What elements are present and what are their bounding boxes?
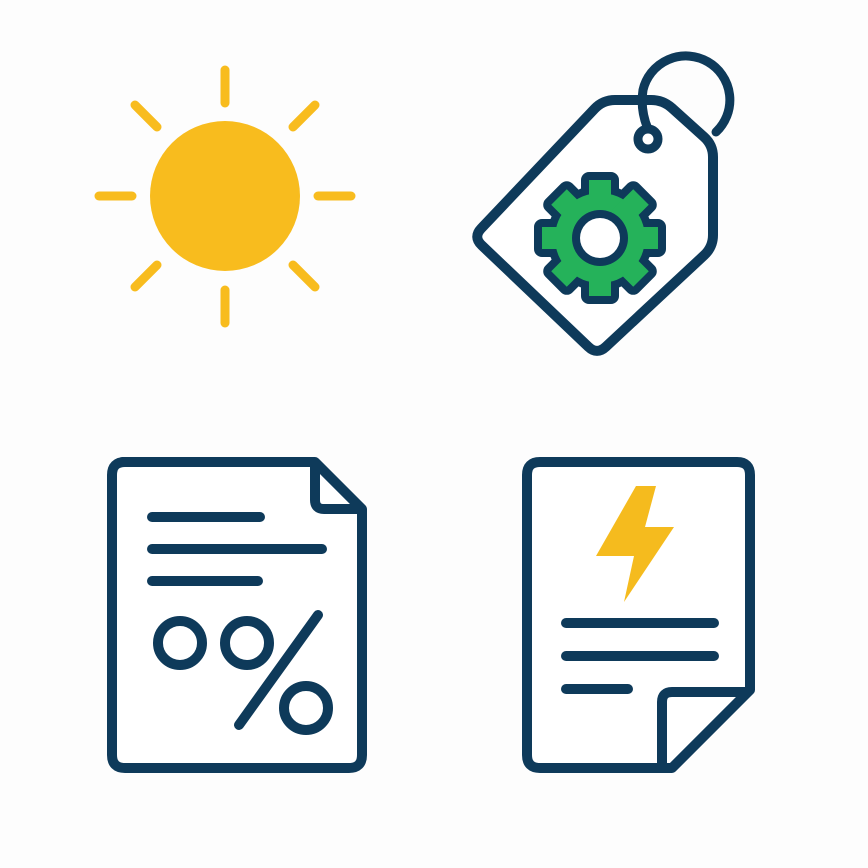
icon: tag with gear xyxy=(477,56,730,351)
icon: sun xyxy=(99,70,351,323)
icon: percent document xyxy=(112,462,362,768)
gear xyxy=(542,180,658,296)
icon: energy bill document xyxy=(527,462,750,768)
lightning bolt xyxy=(596,486,674,602)
